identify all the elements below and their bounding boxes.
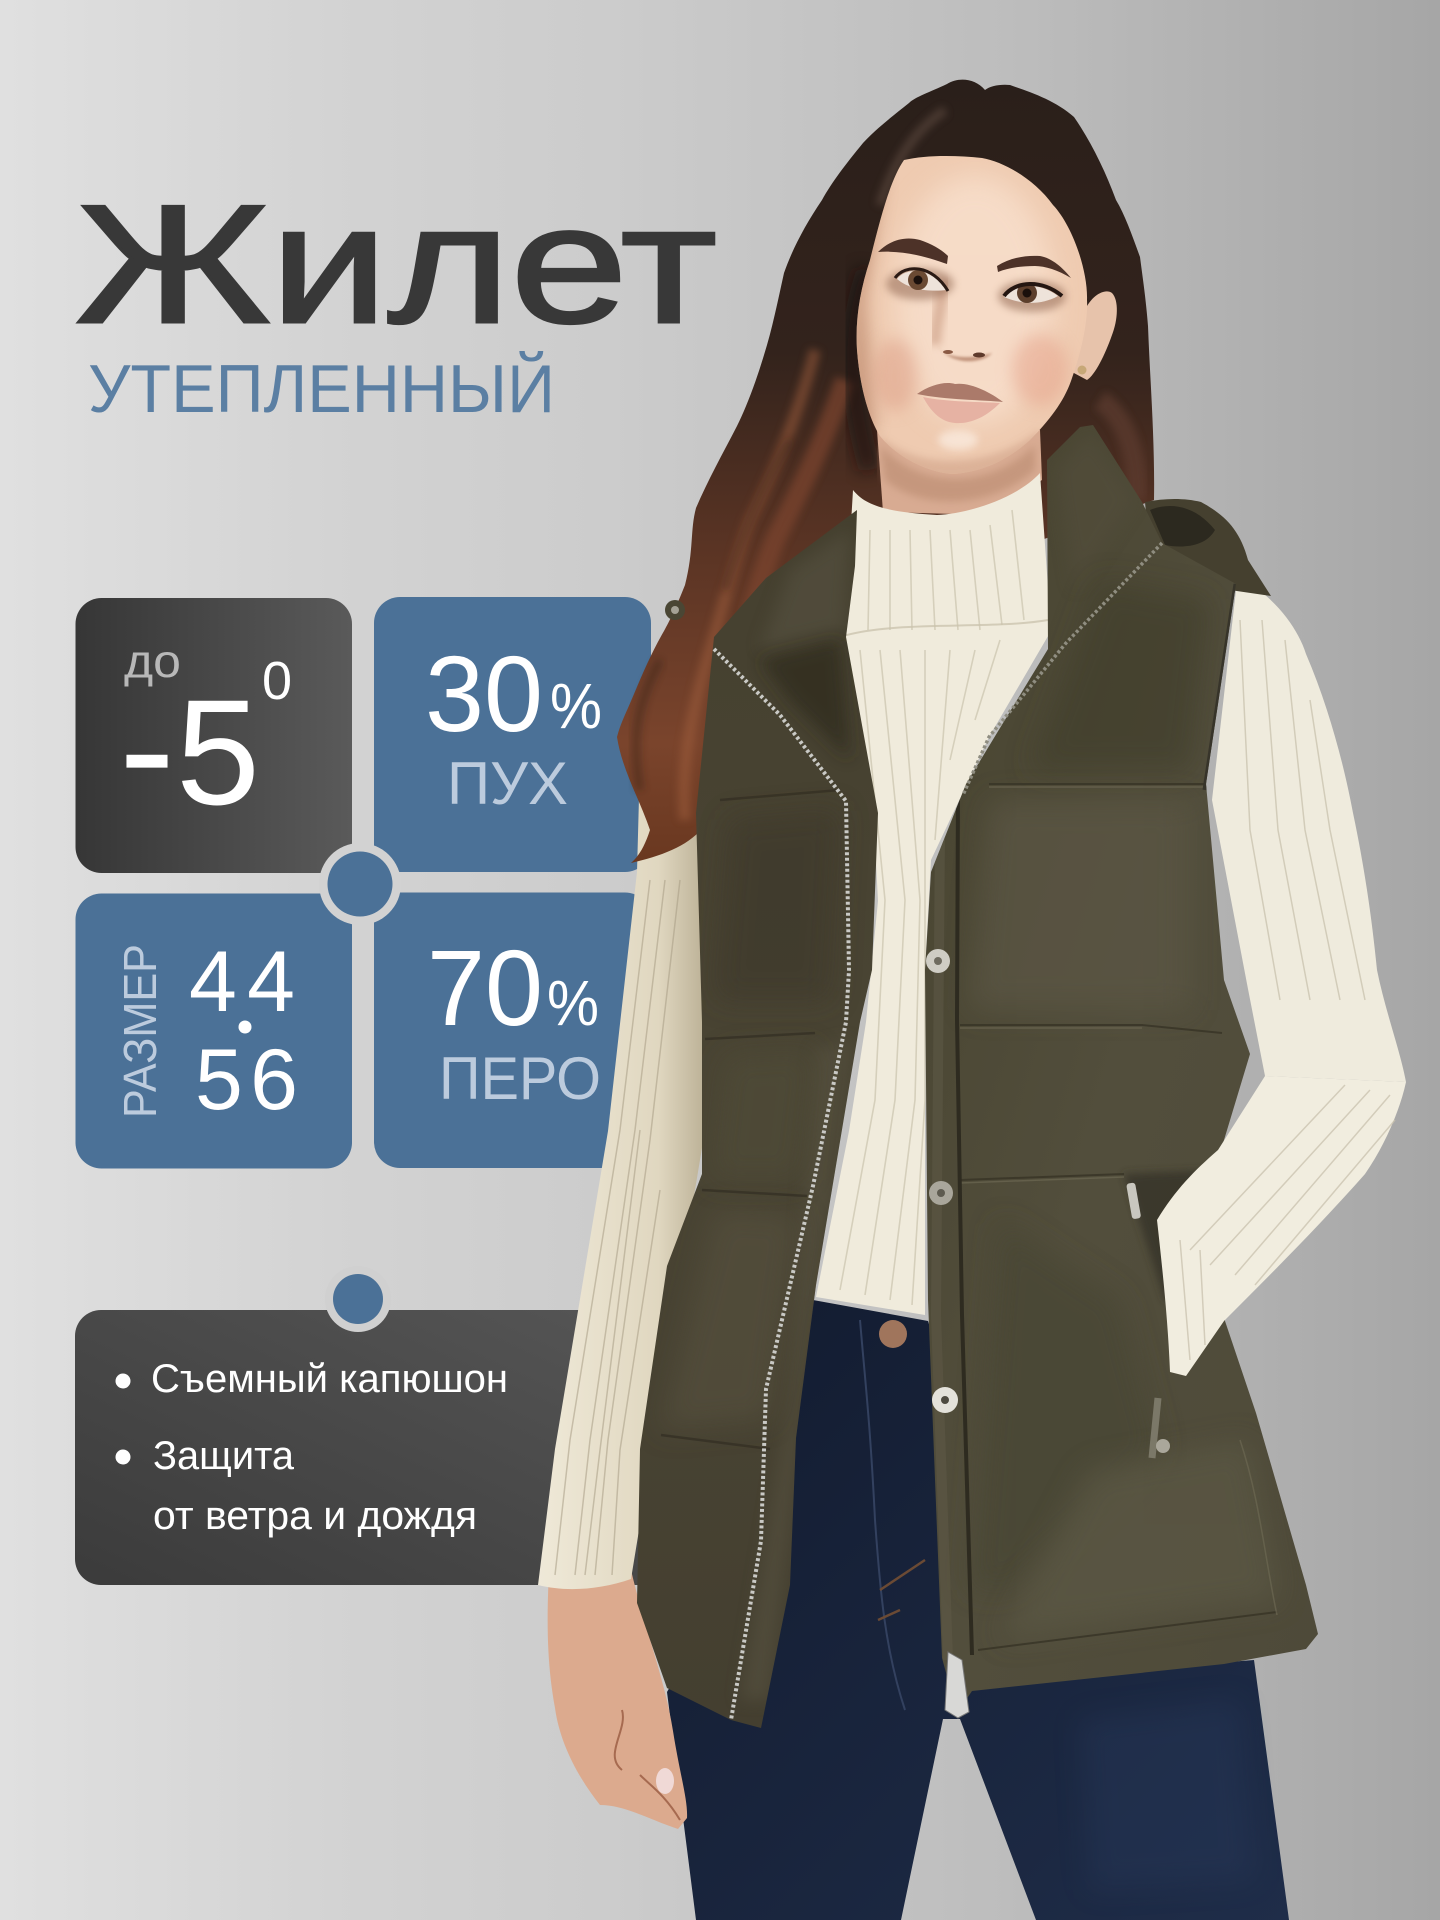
- panel: down percentage: %: [550, 670, 602, 742]
- jeans: [667, 1300, 1289, 1920]
- zipper right: [963, 543, 1162, 795]
- face: [850, 156, 1117, 480]
- pocket zips: [1126, 1182, 1170, 1458]
- ear: [1072, 291, 1117, 380]
- panel: feather percentage: ПЕРО: [439, 1045, 601, 1112]
- vest right panel: [925, 425, 1318, 1713]
- panel: down percentage: ПУХ: [447, 750, 568, 817]
- panel: sizes: РАЗМЕР: [114, 944, 166, 1118]
- title: Жилет: [76, 170, 717, 358]
- panel: temperature: 5: [176, 668, 260, 836]
- right forearm: [1157, 1076, 1406, 1376]
- panel: features: Защита: [153, 1434, 295, 1478]
- panel: sizes: 56: [195, 1032, 298, 1128]
- icon: centre circle: [319, 843, 401, 925]
- panel: sizes: [76, 894, 352, 1168]
- subtitle: УТЕПЛЕННЫЙ: [88, 350, 555, 427]
- panel: features: Съемный капюшон: [151, 1357, 508, 1401]
- panel: down percentage: [374, 597, 651, 872]
- panel: feather percentage: [374, 892, 651, 1168]
- panel: temperature: -: [119, 656, 175, 840]
- eyes: [886, 268, 1066, 312]
- eyebrows: [878, 238, 1071, 278]
- zipper left: [714, 649, 849, 1720]
- panel: temperature: до: [124, 635, 181, 687]
- hair: [617, 80, 1154, 863]
- hood: [1145, 499, 1271, 596]
- panel: features: [75, 1310, 675, 1585]
- nose: [938, 347, 992, 361]
- panel: temperature: 0: [262, 651, 292, 711]
- panel: feather percentage: %: [547, 967, 599, 1039]
- right sleeve: [1212, 590, 1406, 1082]
- sweater: [816, 473, 1051, 1315]
- hand: [548, 1570, 687, 1829]
- panel: down percentage: 30: [425, 633, 543, 754]
- panel: features: от ветра и дождя: [153, 1494, 477, 1538]
- panel: sizes: 44: [189, 934, 295, 1030]
- panel: temperature: [76, 598, 352, 873]
- buttons: [926, 949, 958, 1413]
- icon: features circle: [325, 1266, 391, 1332]
- lips: [917, 383, 1003, 423]
- zipper pull: [945, 1652, 969, 1718]
- vest left panel: [637, 510, 878, 1728]
- model photo illustration: [538, 80, 1406, 1920]
- neck: [877, 430, 1042, 515]
- left sleeve: [538, 760, 710, 1589]
- panel: feather percentage: 70: [427, 927, 543, 1048]
- collar snap: [665, 600, 685, 620]
